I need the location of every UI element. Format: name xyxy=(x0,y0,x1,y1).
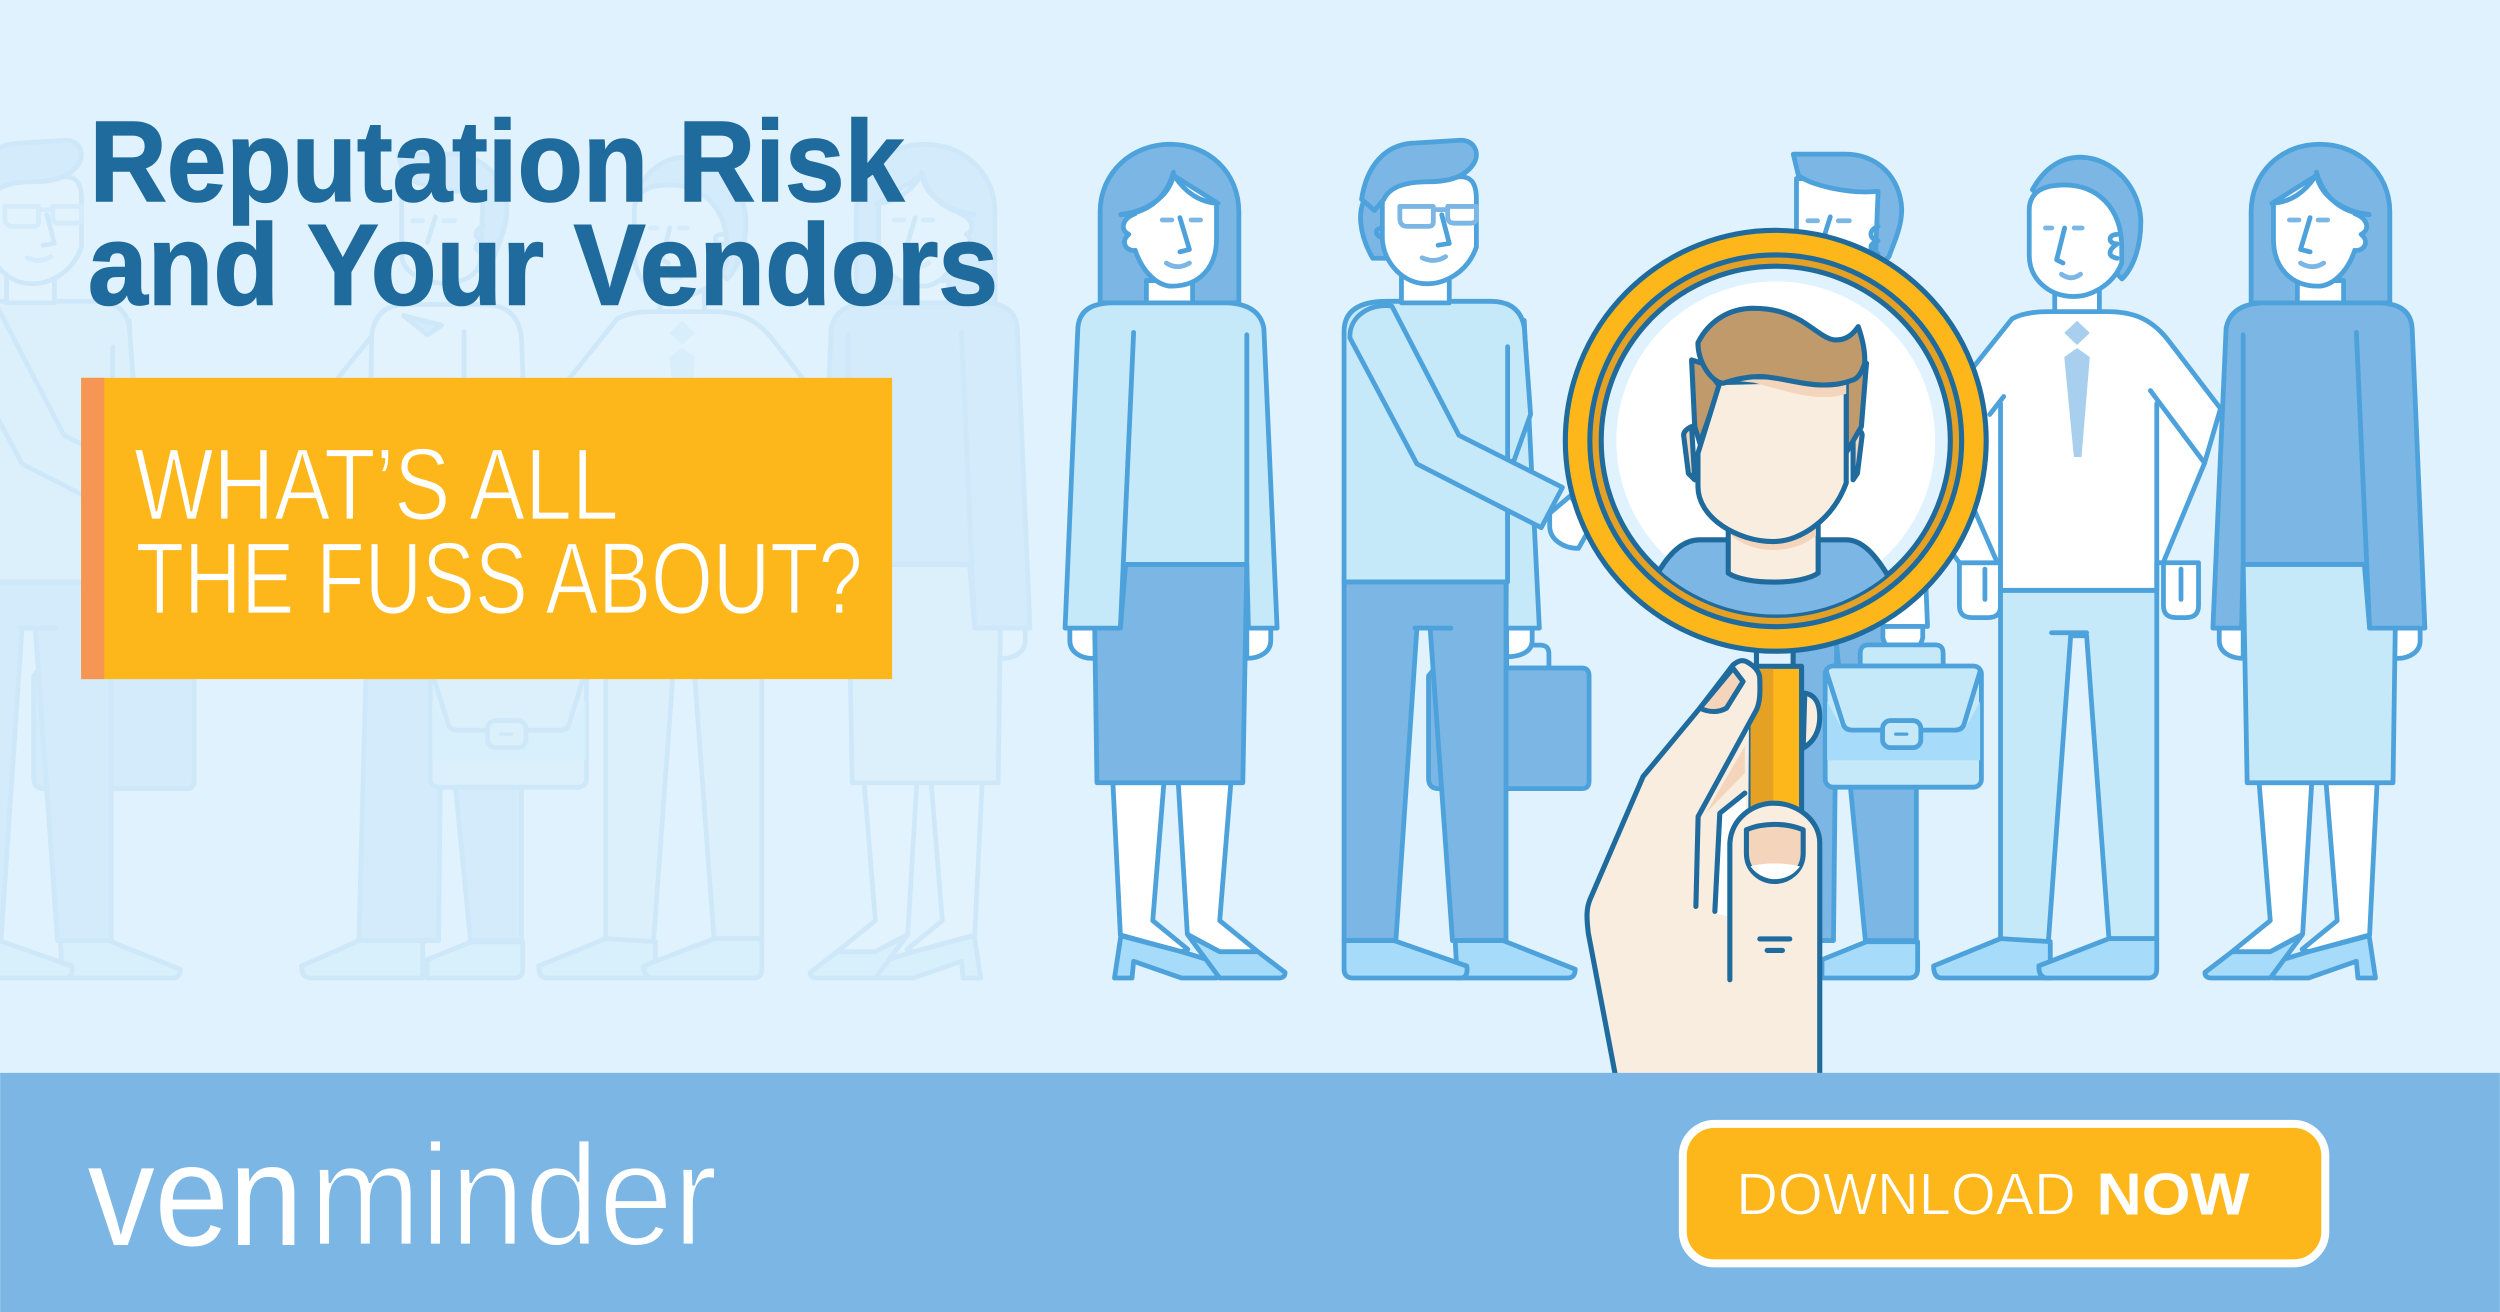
figure: woman in light sweater xyxy=(1065,144,1285,978)
title: and Your Vendors xyxy=(88,201,998,329)
logo: venminder: ven xyxy=(88,1114,303,1276)
callout text: WHAT’S ALL xyxy=(134,428,619,542)
handle xyxy=(1748,650,1802,813)
logo: venminder: minder xyxy=(309,1114,718,1276)
button label: NOW xyxy=(2097,1163,2250,1228)
hand holding magnifier xyxy=(1587,661,1820,1073)
button label: DOWNLOAD xyxy=(1736,1163,2076,1228)
footer band xyxy=(0,1073,2500,1312)
logo: venminder xyxy=(88,1114,718,1276)
magnified vendor portrait xyxy=(1658,306,1888,614)
title xyxy=(88,98,998,329)
callout text xyxy=(134,428,863,636)
magnifying glass xyxy=(1565,230,1986,813)
thumb xyxy=(1730,803,1820,1073)
title: Reputation Risk xyxy=(89,98,904,226)
download button xyxy=(1683,1124,2325,1263)
figure: man with glasses pointing at magnifier xyxy=(1344,140,1591,978)
figure: man in white shirt and tie xyxy=(1932,157,2221,978)
callout box xyxy=(81,378,892,679)
figure: woman in dark sweater xyxy=(2205,144,2425,978)
figure: man partly behind magnifier xyxy=(1696,154,1981,978)
button label xyxy=(1736,1163,2250,1228)
ghosted background figures xyxy=(0,140,1030,978)
callout text: THE FUSS ABOUT? xyxy=(136,522,863,636)
ring xyxy=(1565,230,1986,651)
